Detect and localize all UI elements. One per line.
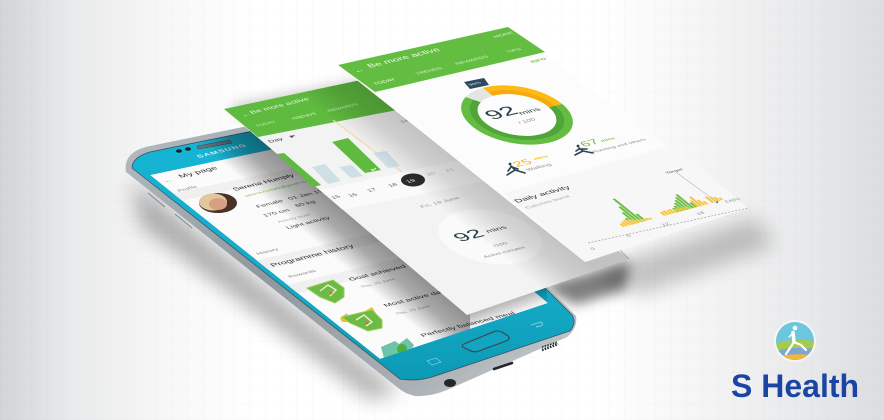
profile details: 60 kg [294, 200, 317, 208]
active minutes circle [417, 201, 563, 273]
profile details: Female [255, 199, 285, 209]
daily activity heading: Daily activity [512, 184, 573, 204]
home button [462, 331, 509, 352]
donut chart [444, 79, 590, 151]
profile details: Serena Humply [231, 173, 296, 192]
donut value: 92 [479, 103, 523, 122]
activity bars [594, 177, 723, 227]
profile details: Light activity [285, 216, 333, 230]
rear panel header [224, 73, 428, 137]
front panel header [338, 27, 545, 92]
percent badge: 90% [467, 81, 483, 87]
phone teal glass [132, 108, 574, 380]
history section [256, 244, 353, 278]
front header text: Be more active [365, 47, 443, 69]
active minutes circle: 92 [448, 227, 489, 244]
front header text: TODAY [372, 78, 398, 86]
rear header title [239, 96, 360, 128]
shadow of rear panel bottom edge on the phone [470, 288, 548, 328]
profile details: Activity level [276, 213, 312, 224]
profile details: serena.humply@gmail.com [243, 179, 313, 198]
date numbers: 15 [330, 194, 343, 200]
front header text: ← [351, 67, 367, 74]
date numbers [330, 167, 457, 200]
reward: goal achieved: Thu, 25 June [359, 278, 397, 289]
side buttons [148, 193, 192, 228]
bar chart: 24 [399, 119, 410, 124]
reward: most active day: Thu, 25 June [394, 305, 432, 316]
reward: goal achieved: Goal achieved [347, 264, 408, 282]
donut value: mins [516, 106, 543, 116]
date numbers: 17 [366, 187, 379, 193]
rear header title: REWARDS [326, 103, 360, 113]
day dropdown: Day [267, 137, 286, 144]
history section: History [255, 248, 280, 256]
top bezel: speaker, camera and brand: SAMSUNG [195, 142, 249, 159]
front header text: MORE [492, 31, 515, 39]
rear header title: TODAY [254, 120, 278, 128]
info link: INFO [529, 57, 549, 64]
percent badge [464, 78, 489, 89]
daily activity heading: Calories burnt [524, 194, 572, 210]
history section: Rewards [287, 269, 318, 279]
donut value: / 100 [517, 117, 538, 125]
logo wordmark: S Health [731, 368, 859, 404]
chart axis [588, 208, 748, 243]
running stat: mins [599, 137, 617, 143]
axis labels: 12 [660, 222, 671, 227]
rear header title: TRENDS [290, 112, 319, 121]
front header text: TRENDS [414, 67, 444, 76]
target line [333, 120, 402, 172]
phone screen [150, 134, 548, 362]
panel thin edge [620, 250, 629, 259]
bar chart [277, 119, 410, 187]
date numbers: 19 [405, 178, 418, 184]
reward: perfectly balanced meal [381, 311, 516, 358]
profile details [232, 174, 330, 229]
date numbers: 16 [347, 192, 360, 198]
profile details: 01 Jan 1980 [287, 187, 334, 201]
axis labels: 0 [589, 247, 597, 251]
running stat [575, 137, 648, 155]
phone silver body [126, 102, 576, 396]
reward: most active day [340, 292, 442, 332]
logo badge with runner [774, 320, 816, 362]
phone [126, 102, 576, 396]
reward: perfectly balanced meal: Perfectly balanced meal [419, 310, 518, 338]
rear header title: ← [239, 111, 253, 118]
screen title: My page: My page [176, 165, 220, 179]
profile details: 170 cm [262, 208, 292, 218]
top bezel: speaker, camera and brand [176, 140, 249, 159]
front header text: TIPS [505, 48, 524, 54]
shadow of front panel on rear panel [308, 80, 629, 286]
donut value [479, 103, 543, 125]
walking stat: mins [532, 155, 550, 161]
active minutes circle: Active minutes [482, 246, 527, 259]
running stat: 67 [576, 137, 602, 148]
back key [531, 322, 542, 327]
axis labels: 6 [625, 234, 633, 238]
rear header title: Be more active [248, 96, 311, 115]
walking stat: 25 [509, 157, 535, 168]
shadow of rear panel on the phone [203, 132, 470, 340]
front header text: REWARDS [454, 55, 491, 66]
date strip [320, 158, 500, 210]
back arrow: ← [160, 177, 176, 184]
soft shadows on the background [132, 72, 775, 400]
front app panel: activity summary [338, 27, 748, 262]
reward: most active day: Most active day [382, 289, 448, 308]
active minutes circle: mins [484, 225, 509, 234]
day dropdown [267, 135, 295, 144]
daily activity chart [588, 168, 748, 251]
profile label: Profile [176, 185, 200, 193]
active minutes circle: /100 [492, 242, 510, 248]
S Health logo [731, 320, 859, 404]
date numbers: 18 [387, 182, 400, 188]
target marker [664, 168, 718, 203]
running stat: Running and others [591, 138, 648, 154]
front header text [351, 31, 524, 86]
axis labels [589, 197, 742, 251]
walking stat [507, 155, 553, 175]
date numbers: 20 [425, 171, 438, 177]
daily activity section background [503, 145, 748, 262]
target marker: Target [664, 168, 685, 175]
history section: Programme history [268, 243, 357, 268]
walking stat: Walking [525, 163, 553, 172]
front panel and logo layer [338, 27, 858, 398]
date numbers: 21 [444, 167, 457, 173]
reward: goal achieved [307, 264, 408, 303]
selected date: Fri, 19 June [419, 196, 462, 209]
rear app panel: day view [224, 73, 629, 315]
axis labels: 24(h) [723, 197, 742, 204]
recent apps key [427, 358, 441, 365]
bottom edge: speaker, jack and USB port [444, 342, 558, 387]
axis labels: 18 [695, 211, 706, 216]
avatar [199, 193, 237, 213]
background shadows and phone layer [124, 76, 778, 409]
